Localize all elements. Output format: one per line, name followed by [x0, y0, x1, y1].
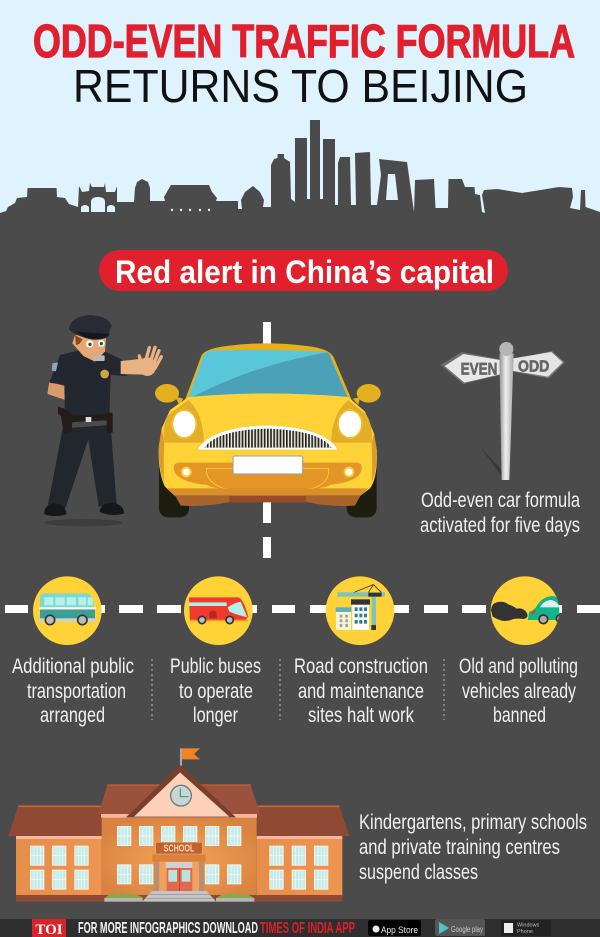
school sign: SCHOOL [164, 844, 194, 855]
car bumper [174, 463, 362, 492]
Beijing skyline silhouette [0, 120, 600, 214]
car roof [185, 343, 352, 400]
background: sky [0, 0, 600, 214]
car tyres [159, 460, 377, 517]
horizontal road markings [5, 605, 600, 613]
school base [16, 895, 342, 902]
car fog lights [181, 467, 354, 477]
officer badge [100, 370, 109, 378]
car mirrors [155, 384, 381, 405]
exhaust smoke [491, 602, 528, 621]
school centre roof [98, 785, 260, 814]
temple dots [171, 209, 210, 211]
car body shading [164, 400, 372, 443]
app store badge: App Store [381, 925, 418, 935]
car windshield [189, 350, 347, 397]
app store badge [368, 920, 421, 936]
footer bar [0, 919, 600, 937]
caption: road construction: sites halt work [308, 704, 414, 727]
school planters [104, 894, 254, 902]
car grille [197, 425, 338, 450]
vertical road markings [263, 322, 271, 558]
icon: crane and buildings [326, 576, 394, 645]
windows phone badge: Windows [517, 922, 540, 928]
windows phone badge [501, 920, 551, 936]
right sign plate [512, 351, 565, 378]
officer legs [48, 425, 117, 508]
officer torso [49, 351, 127, 417]
google play badge: Google play [451, 925, 483, 934]
CCTV tower opening [386, 174, 398, 200]
signpost pole [499, 353, 514, 480]
officer left arm [47, 382, 67, 400]
school walls [16, 817, 342, 896]
windows phone badge: Phone [517, 929, 533, 935]
caption: additional public transportation: arranged [40, 704, 105, 727]
officer forearm and hand [121, 347, 161, 376]
school flag [180, 748, 200, 766]
yellow car [155, 343, 381, 517]
caption: road construction: and maintenance [298, 680, 424, 703]
caption: odd-even formula [420, 489, 580, 537]
car body [159, 393, 377, 496]
traffic police officer [44, 315, 161, 526]
title line 2: RETURNS TO BEIJING [73, 60, 528, 112]
signpost shadow [480, 447, 502, 477]
caption: additional public transportation: transportation [27, 680, 126, 703]
footer message: FOR MORE INFOGRAPHICS DOWNLOAD [78, 920, 258, 937]
caption: old and polluting vehicles: banned [493, 704, 546, 727]
left sign plate [441, 352, 500, 384]
number plate [233, 456, 303, 474]
caption: old and polluting vehicles [459, 655, 578, 727]
school windows [30, 826, 328, 890]
officer belt and holster [58, 407, 113, 434]
signpost knob [499, 342, 513, 356]
school wing roofs [8, 806, 349, 836]
caption: schools suspend classes: suspend classes [359, 861, 478, 884]
icon: teal bus [33, 576, 102, 645]
icon: polluting car [491, 576, 564, 645]
gate arches [81, 197, 115, 212]
green car [528, 596, 560, 620]
school entrance [152, 854, 206, 892]
title [33, 15, 575, 112]
car lower trim [167, 488, 368, 496]
TOI logo [32, 919, 66, 937]
officer cap [69, 315, 112, 340]
caption: additional public transportation [12, 655, 134, 727]
officer shoes [44, 503, 124, 516]
sign word: odd: ODD [518, 359, 549, 376]
heading pill: red alert: Red alert in China’s capital [115, 254, 494, 290]
school building [8, 748, 349, 902]
signpost: even / odd [441, 342, 565, 480]
sign word: even: EVEN [461, 360, 497, 379]
caption: road construction: Road construction [294, 655, 428, 678]
icon: red bus [184, 576, 253, 645]
google play badge [435, 919, 485, 936]
car headlights [172, 410, 362, 438]
officer face [72, 335, 106, 362]
caption: public buses: longer [193, 704, 238, 727]
school sign [156, 842, 202, 855]
caption: road construction [294, 655, 428, 727]
caption: public buses [170, 655, 261, 727]
caption: additional public transportation: Additional public [12, 655, 134, 678]
caption: schools suspend classes [359, 811, 587, 884]
school steps [142, 891, 216, 902]
caption: public buses: to operate [179, 680, 253, 703]
school gable and clock [126, 765, 236, 817]
caption: public buses: Public buses [170, 655, 261, 678]
footer app name: TIMES OF INDIA APP [260, 920, 355, 937]
